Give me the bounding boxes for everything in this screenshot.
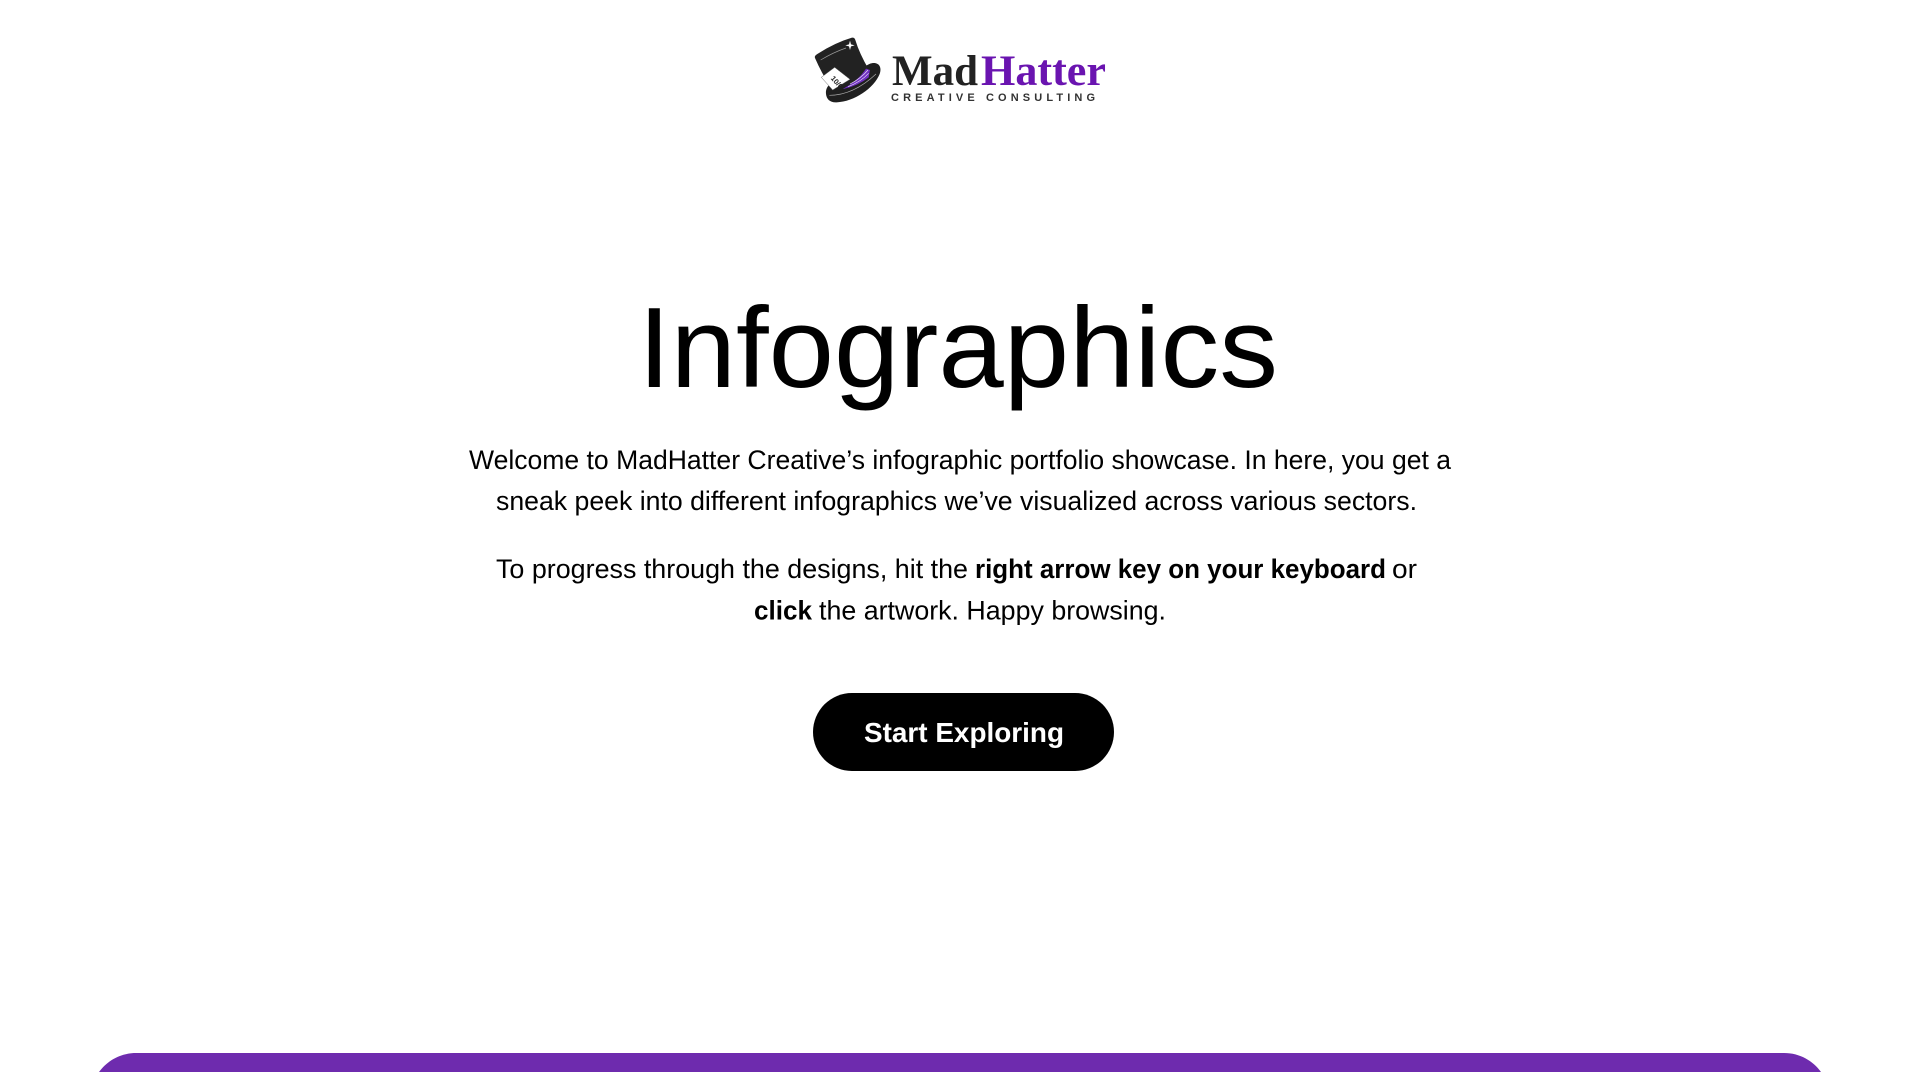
logo wordmark: Hatter: Hatter <box>981 48 1106 95</box>
logo wordmark: Mad: Mad <box>892 48 978 95</box>
icon: top hat: 10/6 <box>829 74 845 91</box>
instructions paragraph: right arrow key on your keyboard <box>975 554 1386 584</box>
button: Start Exploring: Start Exploring <box>864 717 1064 748</box>
purple footer panel <box>99 1053 1821 1072</box>
instructions paragraph: the artwork. Happy browsing. <box>819 596 1166 626</box>
logo: MadHatter Creative Consulting <box>815 38 1106 104</box>
instructions paragraph: To progress through the designs, hit the <box>496 554 968 584</box>
icon: top hat <box>815 38 881 102</box>
button: Start Exploring <box>813 693 1114 771</box>
intro paragraph: sneak peek into different infographics we’ve visualized across various sectors. <box>496 486 1417 516</box>
intro paragraph: Welcome to MadHatter Creative’s infographic portfolio showcase. In here, you get a <box>469 445 1452 475</box>
instructions paragraph: click <box>754 596 813 626</box>
instructions paragraph: or <box>1392 554 1417 584</box>
intro paragraph <box>469 445 1452 516</box>
title: Infographics <box>638 285 1278 412</box>
instructions paragraph <box>496 554 1417 626</box>
logo tagline: CREATIVE CONSULTING <box>891 92 1095 104</box>
